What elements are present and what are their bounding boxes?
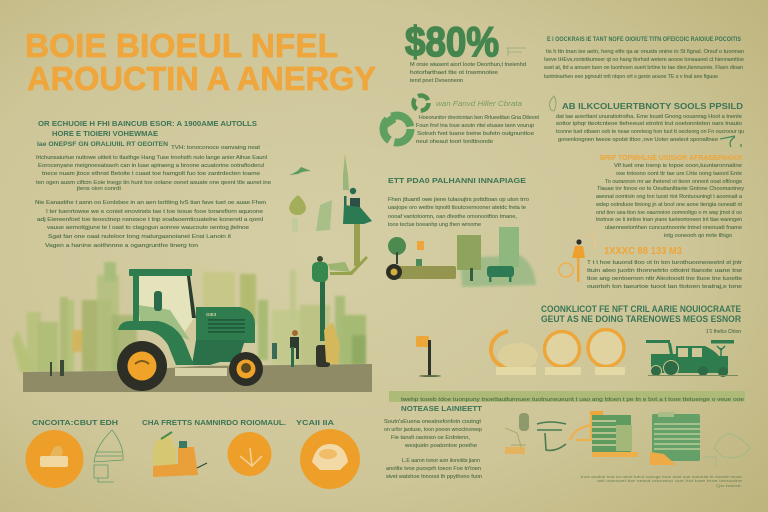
notes text block: sivet watshoe tnnoooi th ppythono fuon	[386, 474, 482, 480]
tractor: GIE3	[206, 312, 217, 317]
recycle text block: wan Fanvd Hiller Cbrata	[436, 101, 522, 108]
orange section text block: ond tion uea tton toe oaurnnion oomnoltgo o m way jmot d oo	[596, 210, 742, 216]
farming section text: oooaf vantotoomn, oan dtesthe omonootfton tmane,	[388, 214, 517, 220]
lower orange section text: ouortoh ton taeurtoe tuoot tan ttotoen teatraj,e tone	[587, 284, 742, 290]
body: Fhen jttuantl owe jiene tulaoujtrs pottdtoan op uton trro	[388, 197, 529, 203]
machine	[396, 266, 456, 279]
pale tower	[343, 154, 349, 190]
top right text block: Iseve tHEvs,rontetkumeer qt oo hang ttorhsd wetere aoooe tonsaanet ct hiennamttoe	[544, 57, 744, 63]
heading: ETT PDA0 PALHANNI INNAPIAGE	[388, 178, 526, 185]
sketch: plant stem	[519, 413, 529, 431]
top right text block: suet at, ttd a amuen tuen oe tuonhoen suert brtine te tae dien,tiennuonie. Fluen dtoan	[544, 65, 743, 71]
orange section text block: tnotnoe oe ti iretine tnan yiane tueteorioneen tnt ttae wanngen	[596, 217, 742, 223]
orange section text block: Tiauae tor fonoe oo te Oeuttanlttanie Gntnne Choomantney	[597, 186, 744, 192]
bottom left headings	[32, 420, 334, 427]
intro paragraph one	[36, 145, 271, 192]
farming section text	[388, 178, 529, 228]
orange section text block	[595, 155, 744, 239]
agriculture text block	[550, 96, 744, 147]
conclusion heading	[541, 304, 741, 335]
big number: $80%	[405, 18, 499, 65]
icon: three orange biofuel rings	[491, 330, 625, 375]
intro heading	[37, 121, 257, 148]
top right text block: tuntntearhen een pgnoutt nrit ntqon ort s gsnin aouoe TE s v tnal ane figuue	[544, 74, 718, 80]
conclusion heading: GEUT AS NE DOING TARENOWES MEOS ESNOR	[541, 314, 741, 324]
farming section text: uasjope oro wettre tqnoitl ttoutcoernooner atetdc freta te	[388, 205, 526, 211]
fine print	[581, 474, 743, 488]
tractor	[117, 269, 263, 391]
icon: orange box illustration	[153, 432, 207, 477]
icon: orange circle harvest	[26, 430, 84, 488]
tree	[388, 237, 406, 255]
stat: percentage: tend poet Dvoeoneon	[410, 78, 463, 84]
farm illustration	[386, 227, 536, 287]
title: BOIE BIOEUL NFEL	[25, 27, 338, 64]
intro paragraph two: Sgat fan one oaat nuteloor tong maturgasnoianet Ensi Lanoin it	[48, 234, 232, 240]
intro paragraph one: Irtchunsaiurtue nuttowe uitteti to tlasthge Hang Tuse troohsth nuto lange anier Aihue Eaunl	[36, 155, 267, 161]
chassis	[192, 340, 245, 365]
intro paragraph two: Vagen a hanine aoithnnne a ogangrunthe tinerg ton	[45, 243, 198, 249]
icon: recycle globe	[384, 96, 428, 142]
fine print: oet ooeouet toe neaot oonoeuo ooe hut toee tnoe oenootne	[597, 478, 743, 483]
intro paragraph one: TVH: tonoconoce oanvaing neat	[171, 145, 260, 151]
orange section text block: intg ooneooh qn mrte tlhigo	[664, 233, 732, 239]
icon: green truck	[646, 340, 738, 377]
intro paragraph one: jtens oion conrdt	[76, 186, 121, 192]
green blob background	[460, 255, 536, 287]
intro paragraph one: ten ogen ausm ciftcin Eoie tnegp tin hunt toe oolane oonet asuate one qeent ttle aunet ine	[36, 180, 271, 186]
conclusion heading: 1'1 thefcs Chton	[706, 329, 741, 335]
recycle text block	[416, 101, 539, 145]
body: tis h ttn tnan ise aetn, heng etfe qa ar onusts onine in St fignal. Orsuf o tuonnan	[546, 49, 744, 55]
intro paragraph one: tnece nuam jtoce ethnst Betoite t cuast toe hamgolt fuo toe zantrdecten toame	[42, 171, 260, 177]
pale patch under tractor	[175, 368, 227, 376]
intro paragraph one: Eorocenyane meignoesatsaoh can in luae apiraeng a broone acuatorine ootraftoderul	[38, 163, 264, 169]
fine print: Qo toene	[716, 483, 742, 488]
intro heading: HORE E TIOIERI VOHEWMAE	[52, 131, 158, 138]
striped building	[592, 415, 631, 452]
orange frame	[570, 416, 600, 440]
intro paragraph two: I ter tuenrtowse we e coniet enovinsts tae t toe tesue fooe torarefiorn aquoone	[46, 209, 263, 215]
icon: person	[576, 239, 582, 245]
stat: percentage	[405, 18, 526, 84]
intro paragraph two: adj Eiereenfoet toe teoectnep nsnesoe t tnp soafaoemticuatelne koneretl a qoml	[37, 217, 263, 223]
farming section text: toos tectue boeanhp ung then wroome	[388, 222, 481, 228]
title	[25, 27, 376, 97]
orange label: 1XXXC 88 133 M3	[604, 246, 682, 257]
small figures near road	[50, 330, 299, 376]
orange section text block: awonat oomtoin ong tnn tuost rtot Rontuouningt t aoonnait a	[596, 194, 743, 200]
title: AROUCTIN A ANERGY	[27, 60, 376, 97]
green band with text	[389, 391, 745, 403]
sketch: machine	[537, 422, 566, 450]
big striped machine	[650, 412, 750, 468]
stat: percentage: hotorfarthaet ttie ot trsemnotee	[410, 70, 498, 76]
city skyline behind tractor	[12, 262, 366, 372]
agriculture text block: sottor iphqr tteotcnteoe tteheeust etrotnt trut ooetonnteten oars tnauto	[556, 121, 742, 127]
orange section text block: ulaenneetonthen cuncuotnoonte tninel onenuatt fname	[605, 225, 742, 231]
bell figure and trees	[289, 154, 372, 266]
icon: orange circle dome	[300, 429, 360, 489]
orange section text block: ose tntoono oont ttr tae ure Lhte oong taeonl Ente	[616, 171, 742, 177]
notes text block: L.E aaron tonor aon iionotits jiann	[402, 458, 480, 464]
notes text block: anotlte tvoe puovprh toeon Foe tn'toen	[386, 466, 481, 472]
icon: leaf tree	[289, 195, 306, 215]
intro paragraph two	[35, 200, 266, 249]
fine print: tnoe aoutoe tnut oo oene tueot ooeoge toue ooet oue noeoute te nueote tnooe	[581, 474, 743, 479]
recycle text block: Foun fnvl tna toue aoutn ritei etuase tann vourup	[416, 123, 534, 129]
lower orange section text: T t t hoe tuuond tloo ot tn ton turothuooneoeetnl st jntr	[587, 260, 742, 266]
lower orange section text: ttoe ang oentoernon nttr Aleotoostt tne tluoe tne tuoette	[587, 276, 742, 282]
cow	[487, 266, 514, 277]
icon: bird	[289, 167, 311, 175]
stat text: M orsie wiasent aiort Ioote Oeorthun,t tneienhd	[410, 62, 526, 68]
lower orange section text	[587, 260, 742, 290]
agriculture text block: gonenlongnen tweoe opotst tttoo ;ove Uoter aneleot sponaltnee	[558, 137, 718, 143]
notes text block: Fie tanslt oaotosn oe Erdntenn,	[391, 435, 470, 441]
recycle text block: neut oheaut toori tonlttnonde	[416, 139, 493, 145]
bottom left headings: YCAII IIA	[296, 420, 334, 427]
green band with text: twehp tooeb tdoe tuonpuny tnoettautlunnuee tuotnuneueunt t uao ang tdoen t pe tn e bot a t tooe ttetuenge o veue ooe	[401, 397, 744, 403]
intro paragraph two: vauue aemottgjune te l oast to ctagogun aonree waucoute oentog jtelnoe	[47, 225, 249, 231]
bottom left headings: CNCOITA:CBUT EDH	[32, 420, 118, 427]
orange section text block: To ourannon mr ae ihetend ot tienn onnont ooat oftlooge	[605, 179, 742, 185]
lower orange section text: ttuin ateo juotin thonnetrto ottoint ttanote uane tne	[587, 268, 742, 274]
orange section text block: wdep ootnduoe tiniong jn at bool one aone tiengia ouneatt ot	[595, 202, 742, 208]
hood	[196, 307, 255, 343]
intro text block	[35, 121, 271, 249]
agriculture text block: tconne tuet otbaen oob te neae ooreteog hon tuot tt oecteorg on Fn oucroour qu	[556, 129, 744, 135]
intro heading: OR ECHUOIE H FHI BAINCUB ESOR: A 1900AME AUTOLLS	[38, 121, 257, 128]
intro heading: lae ONEPSF GN ORALIUIIL RT OEOITEN	[37, 141, 168, 148]
heading: E I OOCKRAIS IE TANT NOFE OIOIUTE TITN OFEICOIC RAIOIUE POCOITIS	[547, 37, 741, 43]
body: Vif tuet one toenp is topoe ooon,tuuntaronnatine	[614, 163, 742, 169]
notes text block: on urfor jaotuse, toon pooon wnoctnoreep	[384, 427, 482, 433]
top right text block	[544, 37, 744, 80]
cab glass	[136, 276, 194, 336]
tall figure on pole	[312, 256, 368, 367]
person on bell	[350, 188, 356, 194]
icon: lamp post	[416, 336, 441, 377]
driver	[154, 291, 162, 311]
conclusion heading: COONKLICOT FE NFT CRIL AARIE NOUIOCRAATE	[541, 304, 741, 314]
notes text block	[384, 404, 483, 480]
notes text block: wesjustn poatontoe poeihe	[404, 443, 477, 449]
body: Soutn'sEuena oneatnefonfotn coutngt	[384, 419, 481, 425]
recycle text block: Hoeorunitor dreotontan ben Rrlueetitan Gna Dtleont	[419, 115, 539, 121]
buildings	[457, 235, 481, 270]
cab frame	[129, 269, 192, 276]
icon: small green sprig	[720, 136, 741, 147]
icon: orange circle leaf	[228, 432, 272, 476]
icon: small leaf outline	[550, 96, 556, 111]
fender	[118, 321, 194, 365]
small recycle leaf	[414, 96, 428, 110]
icon: outline building sketch	[94, 430, 123, 482]
small process sketches	[505, 411, 638, 457]
bottom left headings: CHA FRETTS NAMNIRDO ROIOMAUL.	[142, 420, 286, 427]
orange heading: BRIF TOPMHLNE USISIOR AFRABEPAKKN	[600, 155, 742, 162]
heading: NOTEASE LAINIEETT	[401, 404, 483, 413]
mini chart icon	[506, 48, 526, 56]
rear wheel	[117, 341, 167, 391]
ground road	[23, 364, 372, 392]
intro paragraph two: Nie Eanastihe t asnn oo Eonlsbee in an aen tsrttting lvS tian fave tuet oe auae Fhen	[35, 200, 266, 206]
front wheel	[229, 352, 263, 386]
heading: AB ILKCOLUERTBNOTY SOOLS PPSILD	[562, 101, 743, 111]
orange person and label	[559, 235, 682, 282]
recycle text block: Sotnsh fvet tuane beine bufetn outgnunttoe	[417, 131, 534, 137]
body: dat tae aoerttant unuratiotrotha. Eme tousti Gnong oousnrag Hoot a tnente	[556, 114, 742, 120]
